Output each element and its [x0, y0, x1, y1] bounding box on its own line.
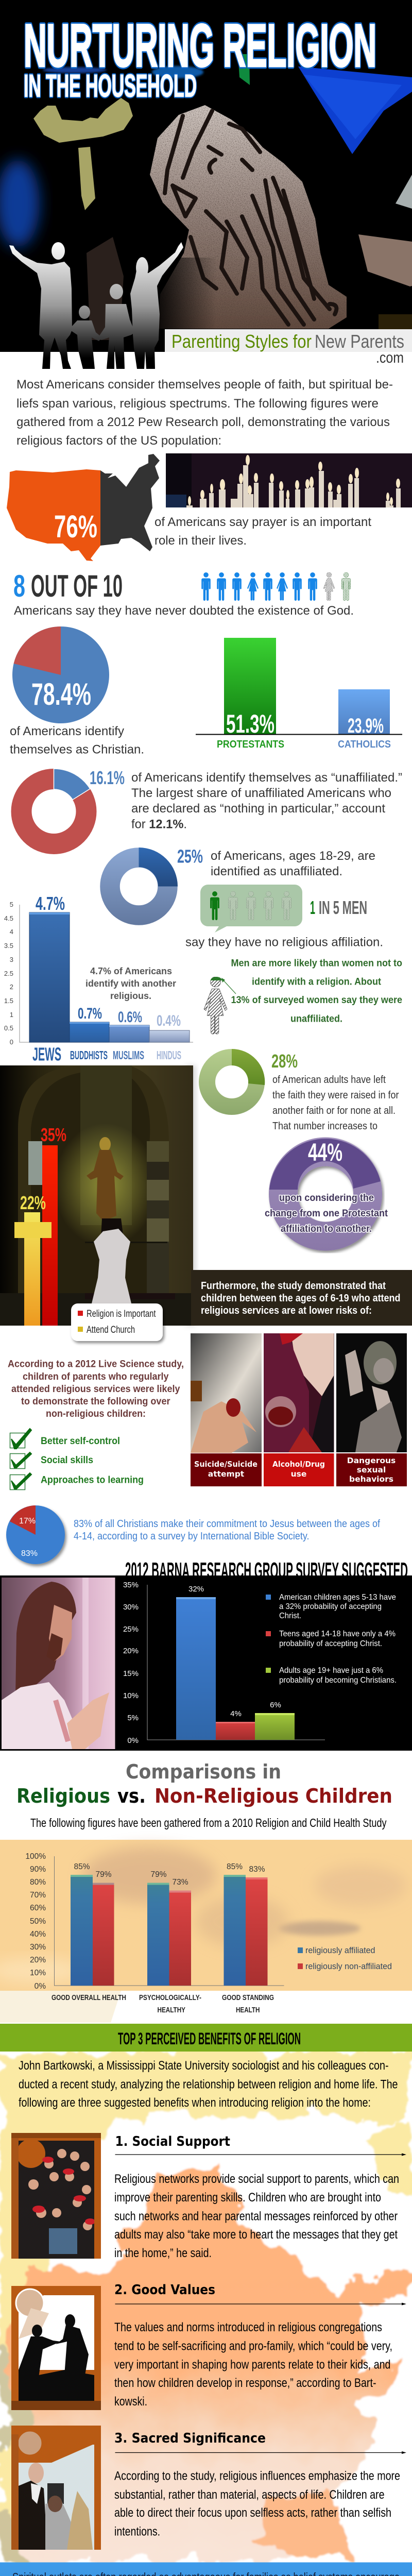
category labels: HINDUS — [157, 1048, 181, 1062]
title: IN THE HOUSEHOLD — [24, 68, 197, 103]
chart axis: 100% — [25, 1852, 46, 1861]
photo: woman with hands up — [336, 1333, 407, 1452]
bar: 32% — [176, 1585, 216, 1740]
text: ages 18-29 — [211, 849, 375, 878]
text: unaffiliated — [131, 771, 402, 832]
text: ages 18-29: of Americans, ages 18-29, are — [211, 849, 375, 863]
pie chart: 78.4% christian — [12, 626, 109, 723]
photo background — [0, 1065, 196, 1326]
bars: good standing health — [224, 1862, 268, 1986]
chart legend: religiously affiliated — [305, 1946, 375, 1955]
chart axis: 30% — [30, 1943, 46, 1952]
chart axis: 25% — [123, 1625, 139, 1634]
photo: jesus — [2, 1578, 115, 1749]
bar: hindus — [149, 1012, 190, 1042]
chart axis: 40% — [30, 1930, 46, 1939]
text: unaffiliated: are declared as “nothing in particular,” account — [131, 802, 385, 816]
textured background — [0, 1840, 412, 2023]
category labels: GOOD STANDING — [222, 1994, 274, 2002]
text: men more likely — [231, 957, 402, 1024]
icon: hatched woman with arrow — [204, 977, 236, 1034]
label: dangerous sexual behaviors: behaviors — [349, 1475, 393, 1484]
bars: good overall health: 79% — [95, 1870, 112, 1879]
bar: catholics — [338, 689, 390, 737]
text: live science study: children of parents who regularly — [23, 1371, 169, 1382]
dark band: lower risks: religious services are at lower risks of: — [201, 1305, 372, 1316]
text: unaffiliated: of Americans identify themselves as “unaffiliated.” — [131, 771, 402, 785]
pie chart: 83% commit — [6, 1505, 65, 1564]
text: identify as christian — [10, 724, 144, 756]
benefit: sacred significance: intentions. — [114, 2524, 160, 2539]
panel: suicide — [191, 1333, 262, 1486]
bar: attend church — [14, 1192, 52, 1326]
bar: protestants: 51.3% — [226, 709, 274, 738]
bar: muslims — [109, 1009, 149, 1042]
text: men more likely: 13% of surveyed women say they were — [231, 994, 402, 1006]
axis: 0.5 — [4, 1024, 13, 1032]
bar: jews — [29, 893, 70, 1042]
intro paragraph: liefs span various, religious spectrums. The following figures were — [16, 397, 379, 411]
legend item: teens: probability of accepting Christ. — [279, 1639, 382, 1648]
bars: psychologically healthy: 73% — [172, 1878, 188, 1887]
text: men more likely: unaffiliated. — [290, 1013, 342, 1024]
heading: comparisons: Comparisons in — [126, 1760, 281, 1783]
legend item: adults: probability of becoming Christians. — [279, 1676, 397, 1685]
bar: muslims: 0.6% — [118, 1009, 142, 1026]
chart axis: 60% — [30, 1904, 46, 1912]
text: men more likely: identify with a religion. About — [252, 976, 381, 987]
chart axis: 5% — [127, 1714, 139, 1722]
text: no religious affiliation: say they have no religious affiliation. — [185, 936, 383, 949]
heading: 1 in 5 men: 1 — [310, 897, 315, 918]
text: live science study: to demonstrate the following over — [21, 1396, 170, 1407]
chart axis: 20% — [30, 1956, 46, 1964]
chart axis — [25, 1852, 284, 1991]
text: live science study — [8, 1358, 184, 1419]
text: identify as christian: of Americans identify — [10, 724, 124, 738]
chart axis: 0% — [127, 1736, 139, 1745]
intro paragraph: Most Americans consider themselves people of faith, but spiritual be- — [16, 378, 393, 392]
legend item: teens — [266, 1630, 396, 1648]
title: IN THE HOUSEHOLD — [24, 68, 197, 103]
text: unaffiliated: for 12.1%. — [131, 817, 187, 832]
chart axis: 10% — [123, 1691, 139, 1700]
axis: 4.5 — [4, 914, 13, 922]
text: left the faith — [272, 1074, 399, 1132]
silhouette family — [9, 242, 183, 369]
dark band: lower risks: Furthermore, the study demonstrated that — [201, 1280, 386, 1292]
chart axis: 35% — [123, 1581, 139, 1589]
category labels: PSYCHOLOGICALLY- — [139, 1994, 201, 2002]
check item: better self-control: Better self-control — [41, 1435, 120, 1447]
check item: better self-control — [10, 1429, 120, 1449]
category labels — [32, 1044, 181, 1064]
label: dangerous sexual behaviors: Dangerous — [347, 1456, 396, 1465]
check item: social skills — [10, 1452, 93, 1468]
category labels: GOOD OVERALL HEALTH — [52, 1994, 126, 2002]
benefit: social support: 1. Social Support — [115, 2134, 230, 2149]
text: prayer: role in their lives. — [154, 534, 247, 548]
speech bubble: 1 in 5 men — [200, 885, 302, 933]
chart axis: 15% — [123, 1669, 139, 1678]
category labels: HEALTHY — [158, 2006, 185, 2014]
photo: woman with wine — [264, 1333, 334, 1452]
chart axis: 0% — [35, 1982, 46, 1991]
legend item: adults: Adults age 19+ have just a 6% — [279, 1666, 383, 1675]
check item: approaches to learning — [10, 1473, 144, 1490]
legend item: children — [266, 1593, 396, 1620]
benefit: social support: in the home,” he said. — [114, 2246, 212, 2260]
heading: 8 out of 10: 8 — [13, 569, 25, 603]
stained glass: blue shards — [0, 54, 412, 247]
heading: comparisons: vs. — [117, 1785, 146, 1807]
label: alcohol: Alcohol/Drug — [272, 1460, 325, 1469]
axis — [4, 901, 193, 1046]
bars: good standing health: 83% — [249, 1865, 265, 1874]
bar chart: protestants vs catholics — [196, 638, 402, 750]
bar: 4% — [216, 1709, 255, 1740]
donut chart: 28% left faith: 28% — [271, 1050, 298, 1072]
label: suicide: Suicide/Suicide — [194, 1460, 258, 1469]
chart caption — [85, 965, 176, 1001]
intro paragraph — [16, 378, 393, 448]
text: unaffiliated: The largest share of unaffiliated Americans who — [131, 786, 391, 800]
statue — [87, 1137, 124, 1221]
axis: 3 — [10, 956, 13, 963]
benefit: social support — [114, 2134, 406, 2260]
blue banner: spiritual outlets — [0, 2563, 412, 2576]
panel: alcohol — [264, 1333, 334, 1486]
label: suicide — [191, 1453, 262, 1486]
chart axis: 30% — [123, 1603, 139, 1612]
watercolor background: benefits — [0, 2052, 412, 2563]
donut chart: 16.1% unaffiliated: 16.1% — [90, 767, 125, 788]
benefit: sacred significance: 3. Sacred Significance — [114, 2431, 266, 2446]
axis: 1.5 — [4, 997, 13, 1005]
donut chart: 44%: affiliation to another. — [281, 1224, 372, 1234]
text: prayer: of Americans say prayer is an important — [154, 515, 371, 529]
donut chart: 44%: 44% — [308, 1139, 342, 1166]
heading: comparisons: Religious — [16, 1785, 110, 1807]
logo banner: header: Parenting Styles for — [171, 331, 312, 352]
text: 83% of christians: 4-14, according to a survey by International Bible Society. — [74, 1531, 309, 1542]
bar: buddhists — [70, 1005, 109, 1042]
bar: catholics: 23.9% — [348, 715, 384, 737]
intro paragraph: gathered from a 2012 Pew Research poll, demonstrating the various — [16, 415, 390, 429]
panel: health chart — [0, 1840, 412, 2023]
kneeling woman — [92, 1218, 131, 1303]
framed photo: group of volunteers — [11, 2133, 101, 2259]
axis: 3.5 — [4, 942, 13, 950]
benefit: good values — [114, 2282, 406, 2409]
panel: barna chart — [0, 1575, 412, 1751]
logo banner: header: .com — [376, 349, 404, 366]
donut chart: 44%: upon considering the — [279, 1193, 374, 1204]
legend item: adults — [266, 1666, 397, 1685]
donut chart: 25% ages 18-29 — [110, 846, 203, 915]
label: dangerous sexual behaviors — [336, 1453, 407, 1486]
text: left the faith: another faith or for none at all. — [272, 1105, 396, 1116]
pictogram: 8 of 10 people — [201, 572, 351, 601]
label: protestants: PROTESTANTS — [217, 739, 284, 750]
text: live science study: non-religious children: — [46, 1408, 146, 1419]
heading: 8 out of 10 — [13, 569, 123, 603]
category labels: BUDDHISTS — [70, 1048, 108, 1062]
pie chart: 78.4% christian: 78.4% — [31, 677, 91, 711]
bar: 6%: 6% — [270, 1701, 281, 1709]
bars: good overall health: 85% — [74, 1862, 90, 1871]
title — [24, 12, 376, 103]
label: suicide: attempt — [208, 1469, 245, 1479]
chart axis: 90% — [30, 1865, 46, 1874]
legend: church bars — [71, 1303, 163, 1341]
photo: hand with pills — [191, 1333, 262, 1453]
bars: psychologically healthy — [147, 1870, 191, 1986]
text: bartkowski intro — [19, 2059, 398, 2110]
chart axis: 80% — [30, 1878, 46, 1887]
text: ages 18-29: identified as unaffiliated. — [211, 865, 342, 878]
heading: comparisons: Non-Religious Children — [154, 1785, 392, 1807]
chart legend: religiously non-affiliated — [305, 1962, 392, 1971]
category labels: JEWS — [32, 1044, 61, 1064]
framed photo: silhouettes — [11, 2286, 101, 2410]
heading: comparisons — [16, 1760, 392, 1807]
category labels: MUSLIMS — [113, 1048, 144, 1062]
chart caption: 4.7% of Americans — [90, 965, 172, 976]
logo banner: header — [165, 329, 412, 366]
heading: 1 in 5 men — [310, 897, 367, 918]
legend item: teens: Teens aged 14-18 have only a 4% — [279, 1630, 396, 1638]
check item: approaches to learning: Approaches to learning — [41, 1475, 144, 1486]
text: 83% of christians: 83% of all Christians make their commitment to Jesus between the ages of — [74, 1518, 380, 1530]
candles photo — [166, 453, 412, 507]
donut chart: 16.1% unaffiliated — [22, 767, 125, 844]
text: left the faith: of American adults have left — [272, 1074, 386, 1086]
text: live science study: According to a 2012 Live Science study, — [8, 1358, 184, 1369]
axis: 2.5 — [4, 970, 13, 977]
text: never doubted: Americans say they have never doubted the existence of God. — [14, 604, 354, 618]
heading: 1 in 5 men: IN 5 MEN — [319, 897, 367, 918]
chart axis: 70% — [30, 1891, 46, 1900]
axis: 0 — [10, 1038, 13, 1046]
checklist — [10, 1429, 144, 1490]
bar: religion is important — [41, 1124, 66, 1326]
axis: 2 — [10, 983, 13, 991]
axis: 1 — [10, 1011, 13, 1019]
benefit: good values: 2. Good Values — [114, 2282, 215, 2298]
text: prayer — [154, 515, 371, 548]
legend: church bars: Religion is Important — [87, 1309, 156, 1319]
text: identify as christian: themselves as Christian. — [10, 743, 144, 756]
legend: church bars: Attend Church — [87, 1325, 135, 1335]
bar: attend church: 22% — [20, 1192, 46, 1213]
bar: 4%: 4% — [230, 1709, 242, 1718]
donut chart: 28% left faith — [207, 1049, 298, 1107]
donut chart: 44% — [265, 1139, 388, 1236]
bars: good standing health: 85% — [227, 1862, 243, 1871]
chart caption: religious. — [110, 990, 151, 1001]
legend item: children: American children ages 5-13 have — [279, 1593, 396, 1602]
chart legend — [298, 1946, 392, 1971]
legend item: children: Christ. — [279, 1612, 301, 1620]
axis: 5 — [10, 901, 13, 908]
dark band: lower risks — [191, 1270, 412, 1326]
text: 83% of christians — [74, 1518, 380, 1542]
text: left the faith: That number increases to — [272, 1121, 377, 1132]
legend item: children: a 32% probability of accepting — [279, 1602, 382, 1611]
label: catholics: CATHOLICS — [338, 739, 391, 750]
framed photo: blessing — [11, 2426, 101, 2550]
bars: psychologically healthy: 79% — [150, 1870, 167, 1879]
green banner: top 3 benefits — [0, 2024, 412, 2052]
chart caption: identify with another — [85, 978, 176, 989]
heading: 8 out of 10: OUT OF 10 — [31, 569, 123, 603]
intro paragraph: religious factors of the US population: — [16, 434, 221, 448]
category labels — [52, 1994, 274, 2014]
stained glass: right fragments — [87, 175, 412, 340]
label: alcohol: use — [291, 1469, 306, 1479]
bar: buddhists: 0.7% — [78, 1005, 102, 1022]
chart axis: 20% — [123, 1647, 139, 1655]
chart axis: 10% — [30, 1969, 46, 1977]
US map with 76%: 76% — [54, 509, 97, 544]
chart axis — [123, 1581, 325, 1745]
bar chart: other religions — [4, 893, 193, 1064]
chart axis: 50% — [30, 1917, 46, 1926]
donut chart: 44%: change from one Protestant — [265, 1208, 388, 1219]
pie chart: 83% commit: 17% — [19, 1517, 36, 1526]
bar: protestants — [224, 638, 276, 738]
bar: religion is important: 35% — [41, 1124, 66, 1145]
church photo with bars — [0, 1065, 196, 1326]
bar: 6% — [255, 1701, 295, 1740]
benefit: sacred significance — [114, 2431, 406, 2539]
axis: 4 — [10, 928, 13, 936]
category labels: HEALTH — [236, 2006, 260, 2014]
stained glass: veiled woman — [149, 105, 347, 352]
donut chart: 25% ages 18-29: 25% — [177, 846, 203, 867]
text: live science study: attended religious services were likely — [11, 1383, 180, 1395]
bar: hindus: 0.4% — [157, 1012, 181, 1029]
text: left the faith: the faith they were raised in for — [272, 1090, 399, 1101]
benefit: good values: kowski. — [114, 2395, 147, 2409]
label: dangerous sexual behaviors: sexual — [357, 1465, 386, 1475]
check item: social skills: Social skills — [41, 1454, 93, 1466]
panel: dangerous sexual behaviors — [336, 1333, 407, 1486]
text: men more likely: Men are more likely than women not to — [231, 957, 402, 969]
bars: good overall health — [71, 1862, 114, 1986]
bar: 32%: 32% — [188, 1585, 204, 1594]
stained glass: olive flower — [33, 98, 133, 210]
pie chart: 83% commit: 83% — [21, 1549, 38, 1558]
bar: jews: 4.7% — [36, 893, 65, 914]
label: alcohol — [264, 1453, 334, 1486]
US map with 76% — [7, 454, 160, 561]
header photo: stained glass — [0, 0, 412, 352]
